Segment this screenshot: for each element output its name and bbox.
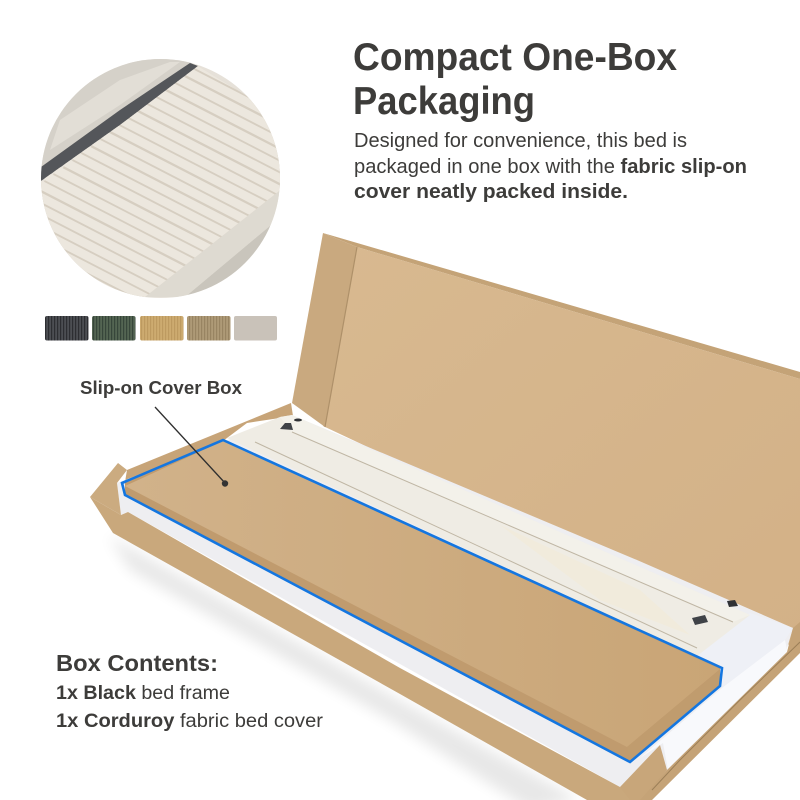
description text <box>354 129 747 203</box>
foam packaging <box>117 415 793 787</box>
description text: packaged in one box with the fabric slip-on <box>354 155 747 178</box>
open cardboard box <box>90 233 800 800</box>
box contents text: Box Contents: <box>56 650 218 676</box>
box contents text <box>56 650 324 732</box>
colour swatches <box>45 316 277 340</box>
right corner flap <box>620 745 667 800</box>
blue outline <box>122 440 722 762</box>
lid top edge <box>323 233 800 379</box>
bed frame slats <box>227 415 750 656</box>
pointer line <box>155 407 228 487</box>
slip-on cover box <box>125 441 720 761</box>
right torn cardboard edge <box>640 622 800 800</box>
description text: cover neatly packed inside. <box>354 180 628 203</box>
box contents text: 1x Corduroy fabric bed cover <box>56 711 324 732</box>
lid inner panel <box>323 247 800 650</box>
slat hardware <box>280 423 293 430</box>
title: Compact One-Box <box>353 36 677 79</box>
label: slip-on cover box: Slip-on Cover Box <box>80 378 242 398</box>
description text: Designed for convenience, this bed is <box>354 129 687 152</box>
cardboard front wall <box>90 497 645 800</box>
fabric close-up circle <box>41 59 280 298</box>
left corner flap <box>90 463 127 515</box>
title <box>353 36 677 123</box>
box contents text: 1x Black bed frame <box>56 683 230 704</box>
lid side flap <box>292 233 357 427</box>
title: Packaging <box>353 80 535 123</box>
back wall of box <box>125 403 293 482</box>
